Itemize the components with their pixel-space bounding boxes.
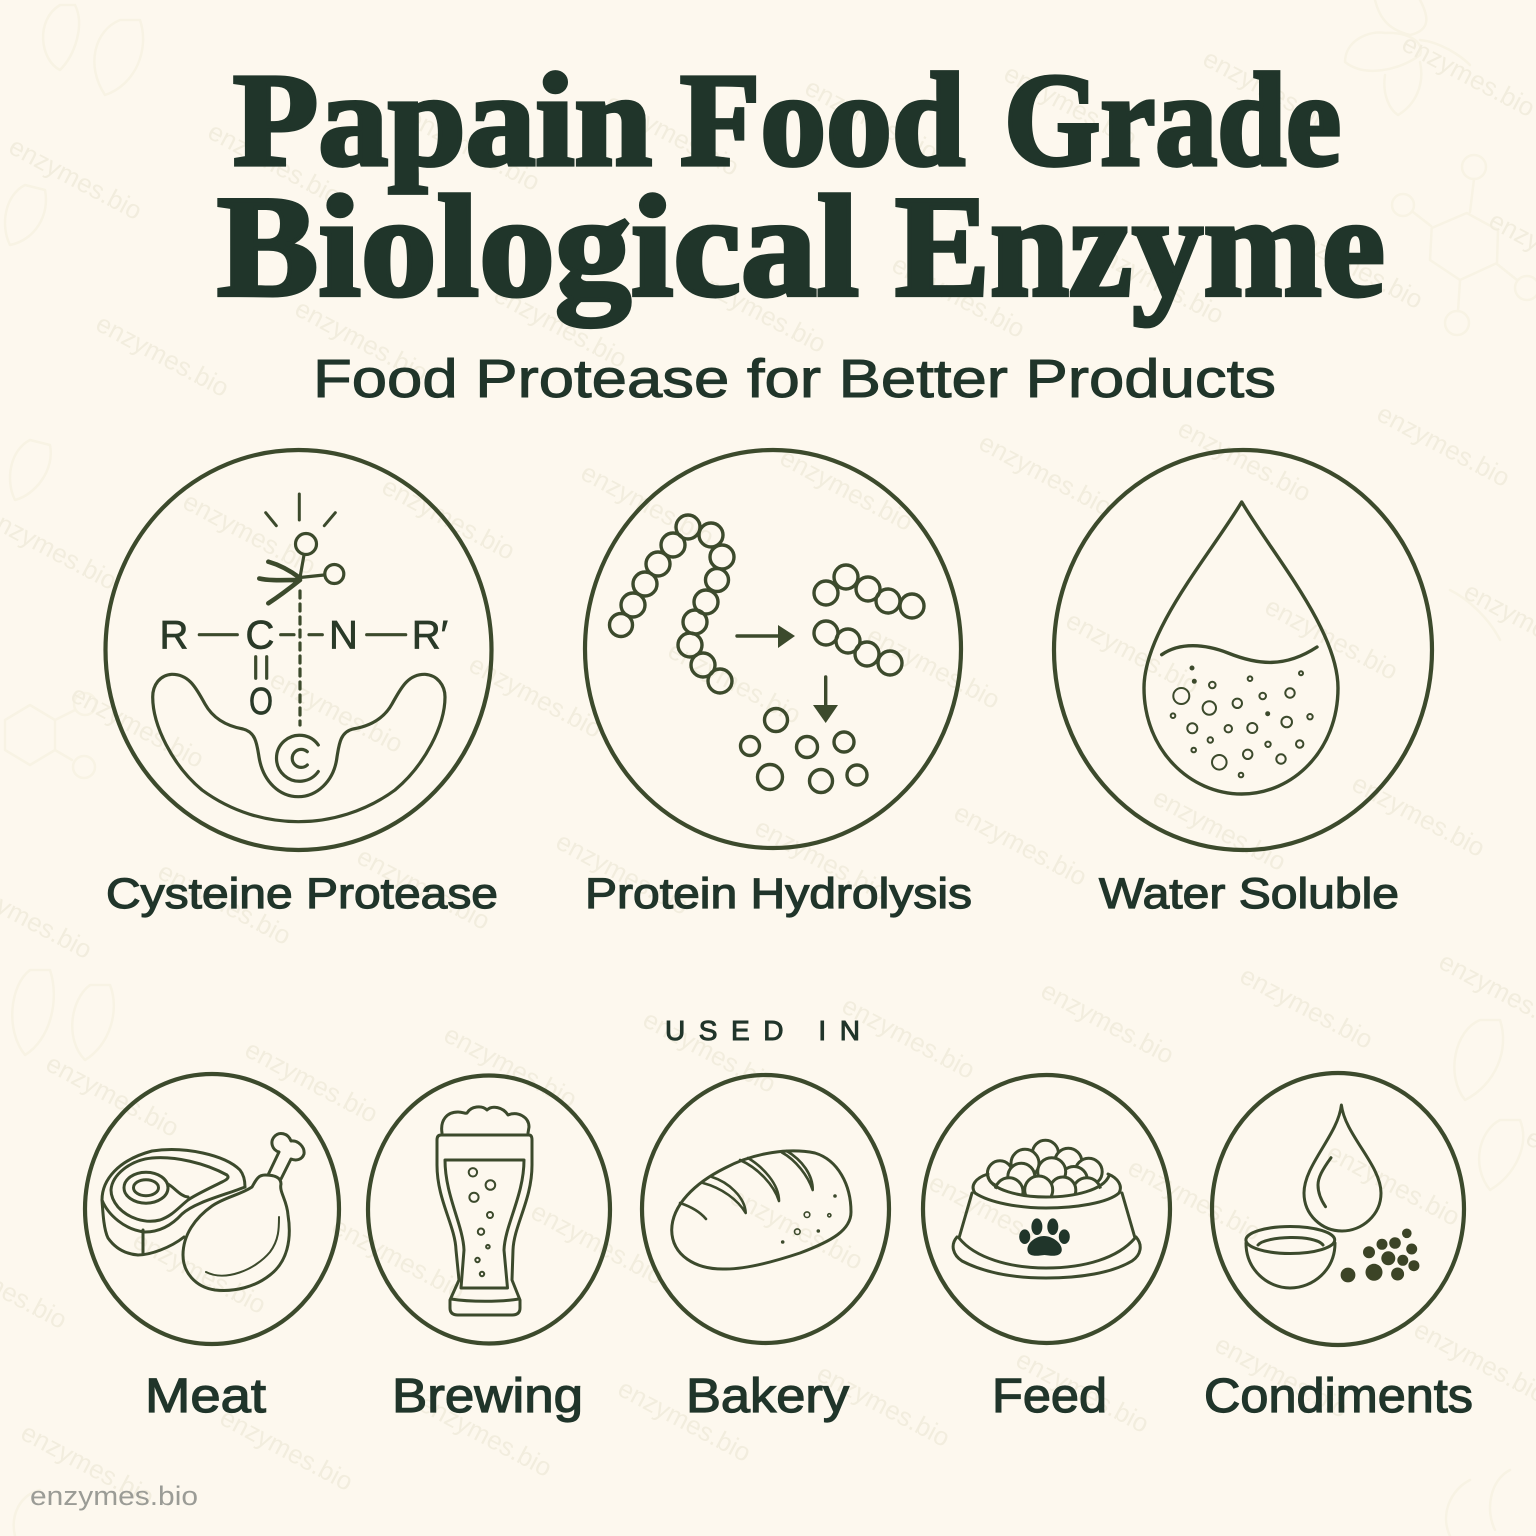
enzyme pocket shape: [153, 674, 445, 822]
background: repeating enzymes.bio watermark: enzymes.bio: [576, 457, 719, 552]
background: repeating enzymes.bio watermark: enzymes.bio: [1347, 768, 1490, 863]
beer bubbles: [469, 1168, 495, 1276]
panel: brewing: [368, 1076, 610, 1344]
background: repeating enzymes.bio watermark: enzymes.bio: [837, 990, 980, 1085]
panel: meat: [85, 1074, 339, 1344]
brand footer: enzymes.bio: [30, 1481, 198, 1511]
background: repeating enzymes.bio watermark: enzymes.bio: [613, 1373, 756, 1468]
background: repeating enzymes.bio watermark: enzymes.bio: [638, 1004, 781, 1099]
badge ring: [106, 450, 492, 850]
icon: paw print: [1019, 1218, 1070, 1256]
peptide bond formula: N: [329, 614, 358, 658]
background: repeating enzymes.bio watermark: enzymes.bio: [999, 58, 1142, 153]
icon: beer glass: [437, 1107, 532, 1315]
background: repeating enzymes.bio watermark: enzymes.bio: [66, 679, 209, 774]
title: Food: [680, 46, 965, 194]
background: repeating enzymes.bio watermark: enzymes.bio: [402, 102, 545, 197]
label: meat: Meat: [145, 1370, 266, 1423]
background: repeating enzymes.bio watermark: enzymes.bio: [1285, 220, 1428, 315]
badge ring: [368, 1076, 610, 1344]
badge ring: [85, 1074, 339, 1344]
peptide bond formula: C: [246, 614, 274, 658]
background: repeating enzymes.bio watermark: enzymes.bio: [153, 856, 296, 951]
arrow down: [813, 677, 838, 723]
water surface wave: [1162, 646, 1317, 662]
heading: used in: USED IN: [665, 1015, 860, 1046]
background: repeating enzymes.bio watermark: enzymes.bio: [489, 279, 632, 374]
icon: kibble pile: [986, 1138, 1104, 1196]
panel: cysteine protease: [106, 450, 492, 850]
background: repeating enzymes.bio watermark: enzymes.bio: [41, 1048, 184, 1143]
background: repeating enzymes.bio watermark: enzymes.bio: [377, 471, 520, 566]
background: repeating enzymes.bio watermark: enzymes.bio: [1198, 43, 1341, 138]
background: repeating enzymes.bio watermark: enzymes.bio: [1061, 605, 1204, 700]
background: repeating enzymes.bio watermark: enzymes.bio: [414, 1388, 557, 1483]
background: repeating enzymes.bio watermark: enzymes.bio: [775, 442, 918, 537]
peptide bond formula: O: [249, 681, 273, 723]
background: repeating enzymes.bio watermark: enzymes.bio: [1397, 28, 1536, 123]
icon: cleaved peptide fragments: [814, 565, 924, 675]
cleavage dashed line: [298, 591, 302, 725]
background: repeating enzymes.bio watermark: enzymes.bio: [1173, 413, 1316, 508]
background: repeating enzymes.bio watermark: enzymes.bio: [974, 427, 1117, 522]
background: repeating enzymes.bio watermark: enzymes.bio: [887, 249, 1030, 344]
background: repeating enzymes.bio watermark: enzymes.bio: [1372, 398, 1515, 493]
background: repeating enzymes.bio watermark: enzymes.bio: [352, 841, 495, 936]
panel: condiments: [1212, 1073, 1464, 1345]
background: repeating enzymes.bio watermark: enzymes.bio: [1260, 591, 1403, 686]
title: Grade: [1004, 46, 1341, 194]
background: repeating enzymes.bio watermark: enzymes.bio: [800, 72, 943, 167]
background: repeating enzymes.bio watermark: enzymes.bio: [688, 264, 831, 359]
panel: feed: [923, 1075, 1170, 1343]
title: Papain: [233, 46, 652, 194]
background: repeating enzymes.bio watermark: enzymes.bio: [215, 1402, 358, 1497]
background: repeating enzymes.bio watermark: enzymes.bio: [601, 87, 744, 182]
background: repeating enzymes.bio watermark: enzymes.bio: [439, 1019, 582, 1114]
peptide bond formula: [160, 614, 448, 723]
badge ring: [1212, 1073, 1464, 1345]
panel: water soluble: [1054, 450, 1432, 850]
background: repeating enzymes.bio watermark: enzymes.bio: [949, 797, 1092, 892]
background: repeating enzymes.bio watermark: enzymes.bio: [725, 1181, 868, 1276]
label: protein hydrolysis: Protein Hydrolysis: [585, 870, 972, 918]
icon: long peptide chain: [610, 515, 734, 693]
title: Enzyme: [895, 167, 1385, 327]
background: repeating enzymes.bio watermark: enzymes.bio: [862, 620, 1005, 715]
label: brewing: Brewing: [392, 1370, 583, 1423]
background: repeating enzymes.bio watermark: enzymes.bio: [464, 649, 607, 744]
background: repeating enzymes.bio watermark: enzymes.bio: [16, 1417, 159, 1512]
background: repeating enzymes.bio watermark: enzymes.bio: [265, 664, 408, 759]
badge ring: [1054, 450, 1432, 850]
background: repeating enzymes.bio watermark: enzymes.bio: [1322, 1137, 1465, 1232]
title: Biological: [217, 167, 859, 327]
background: repeating enzymes.bio watermark: enzymes.bio: [91, 308, 234, 403]
icon: chicken drumstick: [183, 1134, 304, 1290]
label: bakery: Bakery: [686, 1370, 849, 1423]
active site cysteine symbol: [277, 735, 318, 781]
badge ring: [585, 450, 961, 848]
icon: condiment bowl: [1246, 1226, 1335, 1288]
label: cysteine protease: Cysteine Protease: [106, 870, 498, 918]
icon: peppercorns: [1341, 1228, 1419, 1282]
bread crumbs dots: [782, 1195, 836, 1243]
icon: bread loaf: [672, 1151, 851, 1269]
icon: spark rays: [266, 494, 335, 526]
background: repeating enzymes.bio watermark: enzymes.bio: [240, 1034, 383, 1129]
icon: scissors: [259, 534, 344, 603]
badge ring: [642, 1075, 889, 1343]
background: repeating enzymes.bio watermark: enzymes.bio: [812, 1358, 955, 1453]
background: repeating enzymes.bio watermark: enzymes.bio: [203, 116, 346, 211]
background: repeating enzymes.bio watermark: enzymes.bio: [1123, 1152, 1266, 1247]
title: [217, 46, 1385, 327]
icon: pet bowl: [953, 1174, 1140, 1278]
background: repeating enzymes.bio watermark: enzymes.bio: [924, 1167, 1067, 1262]
background: repeating enzymes.bio watermark: enzymes.bio: [128, 1225, 271, 1320]
background: repeating enzymes.bio watermark: enzymes.bio: [1148, 782, 1291, 877]
background: repeating enzymes.bio watermark: enzymes.bio: [663, 635, 806, 730]
background: repeating enzymes.bio watermark: enzymes.bio: [1235, 960, 1378, 1055]
subtitle: Food Protease for Better Products: [313, 349, 1276, 409]
background: repeating enzymes.bio watermark: enzymes.bio: [1210, 1329, 1353, 1424]
peptide bond formula: R′: [412, 614, 448, 658]
background: repeating enzymes.bio watermark: enzymes.bio: [526, 1196, 669, 1291]
background: repeating enzymes.bio watermark: enzymes.bio: [1036, 975, 1179, 1070]
background: repeating enzymes.bio watermark: enzymes.bio: [1011, 1344, 1154, 1439]
badge ring: [923, 1075, 1170, 1343]
peptide bond formula: R: [160, 614, 188, 658]
background: repeating enzymes.bio watermark: enzymes.bio: [4, 131, 147, 226]
icon: water drop: [1144, 502, 1338, 794]
icon: free amino acids: [740, 708, 867, 792]
background: repeating enzymes.bio watermark: enzymes.bio: [178, 486, 321, 581]
panel: bakery: [642, 1075, 889, 1343]
label: feed: Feed: [992, 1370, 1107, 1423]
background: repeating enzymes.bio watermark: enzymes.bio: [290, 293, 433, 388]
icon: sauce drop: [1304, 1105, 1381, 1231]
background: repeating enzymes.bio watermark: enzymes.bio: [1086, 235, 1229, 330]
background: repeating enzymes.bio watermark: enzymes.bio: [327, 1211, 470, 1306]
background: repeating enzymes.bio watermark: enzymes.bio: [551, 826, 694, 921]
arrow right: [737, 625, 795, 648]
background: repeating enzymes.bio watermark: enzymes.bio: [750, 812, 893, 907]
dissolved particles: [1171, 666, 1313, 777]
panel: protein hydrolysis: [585, 450, 961, 848]
label: condiments: Condiments: [1204, 1370, 1473, 1423]
icon: steak: [102, 1150, 245, 1255]
label: water soluble: Water Soluble: [1099, 870, 1399, 918]
